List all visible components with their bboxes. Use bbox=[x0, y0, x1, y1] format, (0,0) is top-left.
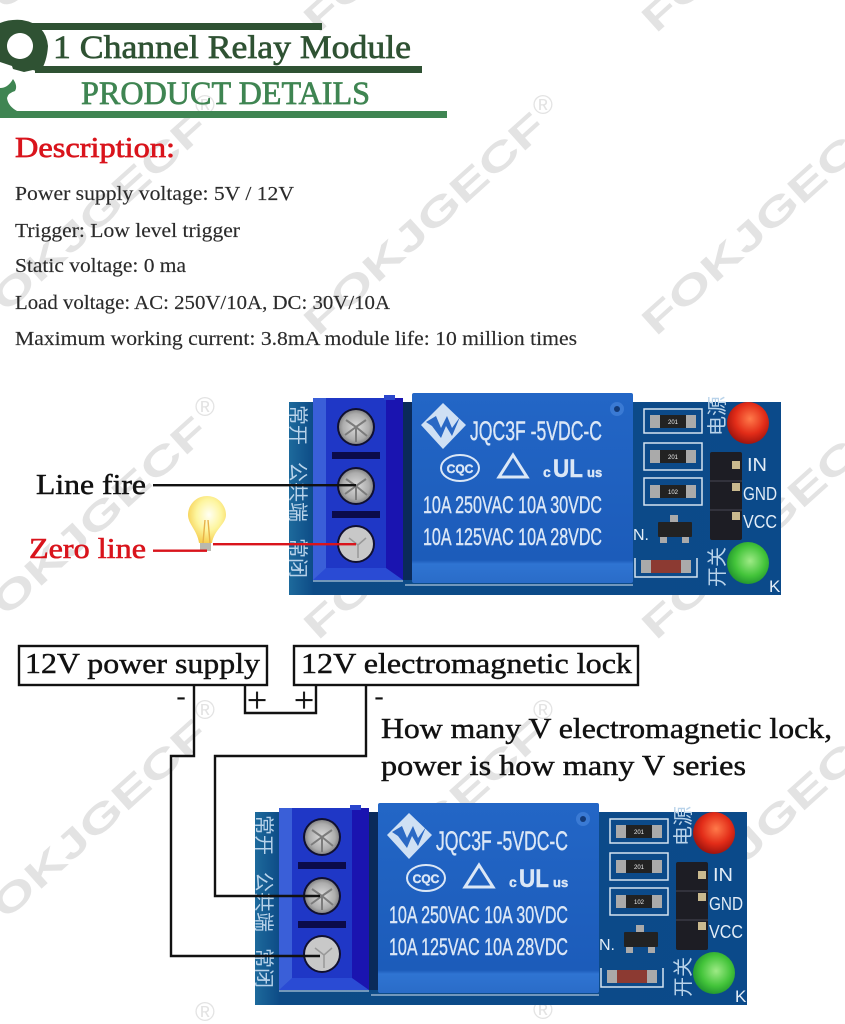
silkscreen labels: 公共端 bbox=[285, 462, 314, 522]
pin header bbox=[633, 452, 781, 596]
watermark pattern: FOKJGECF bbox=[634, 712, 845, 951]
description specs: Maximum working current: 3.8mA module life: 10 million times bbox=[15, 328, 577, 350]
polarity labels bbox=[176, 681, 384, 712]
silkscreen labels: 公共端 bbox=[251, 872, 280, 932]
watermark pattern: ® bbox=[195, 90, 215, 120]
description specs: Trigger: Low level trigger bbox=[15, 220, 240, 242]
smd components: 102 bbox=[668, 490, 679, 496]
screw terminal block bbox=[279, 805, 599, 995]
smd components: 201 bbox=[634, 830, 645, 836]
pin header: K bbox=[735, 987, 747, 1006]
silkscreen labels: 常闭 bbox=[251, 948, 280, 988]
pin header: IN bbox=[713, 865, 733, 885]
pin header: VCC bbox=[743, 512, 777, 532]
circuit board bbox=[255, 812, 747, 1005]
pin header: VCC bbox=[709, 922, 743, 942]
screw terminal block bbox=[313, 395, 633, 585]
description heading: Description: bbox=[15, 132, 175, 164]
silkscreen labels bbox=[251, 806, 696, 997]
relay housing: 10A 250VAC 10A 30VDC bbox=[423, 492, 602, 519]
watermark pattern: ® bbox=[195, 695, 215, 725]
wire: power supply negative to relay bbox=[171, 685, 320, 956]
relay module photo 2 bbox=[251, 803, 747, 1006]
smd components bbox=[635, 409, 702, 577]
pin header bbox=[599, 862, 747, 1006]
wire: positive link bbox=[245, 680, 316, 720]
header banner bbox=[0, 20, 447, 118]
led: red bbox=[693, 812, 735, 854]
relay housing: JQC3F -5VDC-C bbox=[470, 416, 602, 446]
note text: power is how many V series bbox=[381, 750, 746, 782]
wire: positive link: + bbox=[294, 680, 314, 720]
description specs: Power supply voltage: 5V / 12V bbox=[15, 183, 295, 205]
pin header: K bbox=[769, 577, 781, 596]
polarity labels: - bbox=[176, 681, 186, 712]
smd components: 201 bbox=[668, 455, 679, 461]
relay module photo 1 bbox=[285, 393, 781, 596]
pin header: GND bbox=[709, 894, 743, 914]
relay housing bbox=[412, 393, 633, 583]
pin header: N. bbox=[599, 937, 615, 954]
smd components: 201 bbox=[668, 420, 679, 426]
label: line fire: Line fire bbox=[36, 469, 146, 501]
led: green bbox=[693, 952, 735, 994]
description specs: Static voltage: 0 ma bbox=[15, 255, 186, 277]
relay housing: 10A 250VAC 10A 30VDC bbox=[389, 902, 568, 929]
icon: light bulb bbox=[188, 496, 226, 551]
relay housing: c bbox=[509, 874, 517, 890]
title: 1 Channel Relay Module bbox=[53, 30, 411, 66]
smd components: 102 bbox=[634, 900, 645, 906]
relay housing: JQC3F -5VDC-C bbox=[436, 826, 568, 856]
polarity labels: - bbox=[374, 681, 384, 712]
silkscreen labels: 开关 bbox=[667, 957, 696, 997]
pin header: IN bbox=[747, 455, 767, 475]
watermark pattern: ® bbox=[533, 695, 553, 725]
description specs: Load voltage: AC: 250V/10A, DC: 30V/10A bbox=[15, 292, 391, 314]
led: green bbox=[727, 542, 769, 584]
note text: How many V electromagnetic lock, bbox=[381, 713, 832, 745]
silkscreen labels: 常闭 bbox=[285, 538, 314, 578]
watermark pattern: FOKJGECF bbox=[296, 105, 554, 344]
relay housing bbox=[378, 803, 599, 993]
note text bbox=[381, 713, 832, 782]
subtitle: PRODUCT DETAILS bbox=[81, 76, 370, 112]
pin header: GND bbox=[743, 484, 777, 504]
watermark pattern: ® bbox=[195, 392, 215, 422]
silkscreen labels: 常开 bbox=[251, 815, 280, 855]
smd components: 201 bbox=[634, 865, 645, 871]
relay housing: UL bbox=[519, 865, 549, 893]
watermark pattern: FOKJGECF bbox=[296, 712, 554, 951]
wire: lock negative to relay bbox=[215, 685, 366, 896]
description specs bbox=[15, 183, 577, 350]
relay housing: us bbox=[553, 875, 568, 890]
watermark pattern: FOKJGECF bbox=[634, 409, 845, 648]
watermark pattern: FOKJGECF bbox=[634, 105, 845, 344]
wire: positive link: + bbox=[247, 680, 267, 720]
silkscreen labels: 开关 bbox=[701, 547, 730, 587]
relay housing: us bbox=[587, 465, 602, 480]
pin header: N. bbox=[633, 527, 649, 544]
circuit board bbox=[289, 402, 781, 595]
led: red bbox=[727, 402, 769, 444]
label: zero line: Zero line bbox=[29, 533, 146, 565]
watermark pattern: ® bbox=[533, 90, 553, 120]
relay housing: CQC bbox=[447, 462, 474, 476]
relay housing: UL bbox=[553, 455, 583, 483]
silkscreen labels: 电源 bbox=[667, 806, 696, 846]
silkscreen labels: 常开 bbox=[285, 405, 314, 445]
relay housing: c bbox=[543, 464, 551, 480]
relay housing: CQC bbox=[413, 872, 440, 886]
smd components bbox=[601, 819, 668, 987]
silkscreen labels bbox=[285, 396, 730, 587]
box: 12V power supply: 12V power supply bbox=[25, 648, 261, 680]
watermark pattern: FOKJGECF bbox=[296, 409, 554, 648]
box: 12V electromagnetic lock: 12V electromagnetic lock bbox=[301, 648, 633, 680]
silkscreen labels: 电源 bbox=[701, 396, 730, 436]
relay housing: 10A 125VAC 10A 28VDC bbox=[423, 524, 602, 551]
relay housing: 10A 125VAC 10A 28VDC bbox=[389, 934, 568, 961]
header emblem and rules bbox=[0, 20, 447, 118]
